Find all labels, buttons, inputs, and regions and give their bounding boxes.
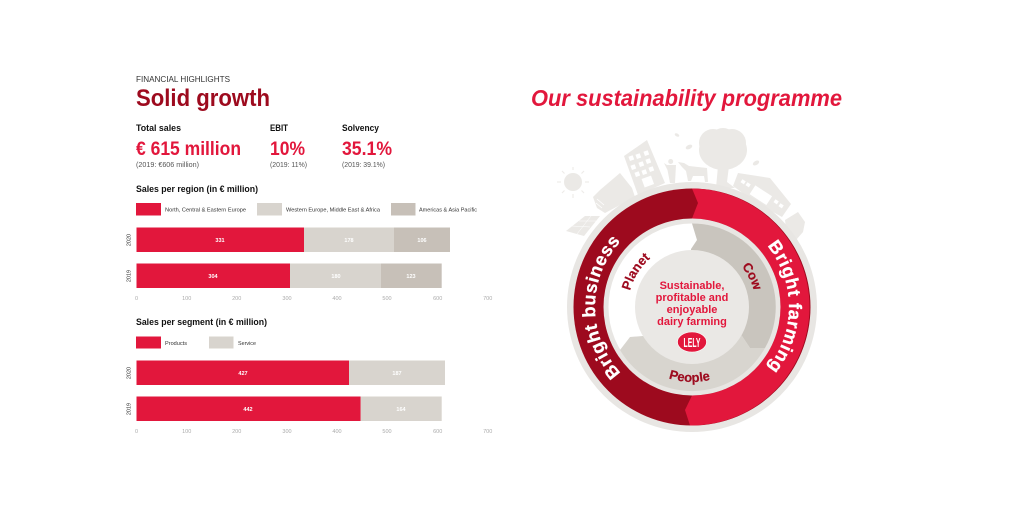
segment: People <box>620 300 765 391</box>
centre text: Sustainable, <box>660 280 724 292</box>
legend: region: Americas & Asia Pacific <box>419 208 477 214</box>
bar: region 2019 <box>136 264 442 288</box>
bar: region 2020: 106 <box>417 238 427 244</box>
legend: segment: Service <box>238 341 256 347</box>
section label: FINANCIAL HIGHLIGHTS <box>136 74 230 84</box>
centre text: profitable and <box>656 292 728 304</box>
icon: leaves <box>674 132 760 166</box>
KPI: solvency: Solvency <box>342 123 379 133</box>
legend: region <box>136 203 477 216</box>
KPI: EBIT: (2019: 11%) <box>270 160 307 169</box>
x axis: 300 <box>282 429 292 435</box>
bar: segment 2020: 427 <box>238 371 248 377</box>
chart heading: sales per segment: Sales per segment (in € million) <box>136 317 267 327</box>
bar: segment 2020 <box>136 360 445 385</box>
centre circle <box>635 250 749 364</box>
x axis: 300 <box>282 296 292 302</box>
x axis: 600 <box>433 429 442 435</box>
illustration: skyline around the wheel <box>557 128 805 240</box>
KPI: EBIT: 10% <box>270 139 305 160</box>
year labels: 2019 <box>126 270 132 282</box>
icon: sun <box>557 167 589 198</box>
x axis: 200 <box>232 296 241 302</box>
label: Bright farming: Bright farming <box>766 239 802 373</box>
bar: region 2019: 304 <box>208 274 219 280</box>
icon: farmer <box>664 159 676 183</box>
x axis: 500 <box>382 296 392 302</box>
year labels: 2020 <box>126 367 132 379</box>
label: People: People <box>669 370 710 385</box>
bar chart: sales per region <box>126 228 492 302</box>
icon: building <box>624 140 665 195</box>
heading: Solid growth: Solid growth <box>136 85 270 112</box>
KPI: total sales: Total sales <box>136 123 181 133</box>
bar: segment 2019: 442 <box>243 407 253 413</box>
x axis: 600 <box>433 296 442 302</box>
KPI: solvency: 35.1% <box>342 139 392 160</box>
icon: farmhouse <box>733 173 791 217</box>
x axis: 700 <box>483 296 492 302</box>
KPI: EBIT: EBIT <box>270 123 288 133</box>
ring: Bright farming <box>685 188 810 426</box>
legend: region: North, Central & Eastern Europe <box>165 208 246 214</box>
x axis: 0 <box>135 296 138 302</box>
year labels <box>126 234 132 282</box>
KPI: solvency: (2019: 39.1%) <box>342 160 385 169</box>
segment: Planet <box>608 224 776 390</box>
icon: solar panel <box>566 216 600 236</box>
bar: region 2019: 123 <box>406 274 416 280</box>
legend: segment <box>136 336 256 348</box>
segment: Cow <box>691 223 776 348</box>
bar: region 2020: 331 <box>215 238 225 244</box>
icon: tree <box>699 128 747 188</box>
inner light ring <box>604 218 780 396</box>
centre text <box>656 280 728 328</box>
x axis: 500 <box>382 429 392 435</box>
KPI: solvency <box>342 123 392 169</box>
legend: region: Western Europe, Middle East & Africa <box>286 208 381 214</box>
year labels: 2019 <box>126 403 132 415</box>
KPI: total sales: € 615 million <box>136 139 241 160</box>
centre text: dairy farming <box>657 316 727 328</box>
year labels: 2020 <box>126 234 132 246</box>
bar: region 2020 <box>136 228 450 252</box>
year labels <box>126 367 132 415</box>
title: sustainability programme: Our sustainability programme <box>531 85 842 111</box>
x axis: 100 <box>182 429 191 435</box>
logo: Lely <box>678 332 706 352</box>
label: Planet: Planet <box>622 253 650 290</box>
chart heading: sales per region: Sales per region (in € million) <box>136 184 258 194</box>
bar: segment 2020: 187 <box>392 371 402 377</box>
x axis: 200 <box>232 429 241 435</box>
logo: Lely: LELY <box>684 335 701 350</box>
x axis <box>135 429 492 435</box>
bar: segment 2019 <box>136 396 442 421</box>
wheel: sustainability programme <box>567 182 817 432</box>
icon: truck <box>593 173 635 213</box>
bar: region 2019: 180 <box>331 274 341 280</box>
ring: Bright business <box>574 188 810 426</box>
bar chart: sales per segment <box>126 360 492 435</box>
KPI: total sales <box>136 123 241 169</box>
x axis: 400 <box>332 429 342 435</box>
x axis: 700 <box>483 429 492 435</box>
label: Bright business: Bright business <box>582 237 620 380</box>
bar: segment 2019: 164 <box>396 407 407 413</box>
legend: segment: Products <box>165 341 187 347</box>
x axis: 0 <box>135 429 138 435</box>
x axis: 100 <box>182 296 191 302</box>
KPI: total sales: (2019: €606 million) <box>136 160 199 169</box>
x axis <box>135 296 492 302</box>
x axis: 400 <box>332 296 342 302</box>
bar: region 2020: 178 <box>344 238 354 244</box>
label: Cow: Cow <box>744 263 761 290</box>
icon: tractor <box>785 212 805 240</box>
outer light ring <box>567 182 817 432</box>
KPI: EBIT <box>270 123 307 169</box>
icon: cow <box>678 162 708 182</box>
centre text: enjoyable <box>667 304 717 316</box>
